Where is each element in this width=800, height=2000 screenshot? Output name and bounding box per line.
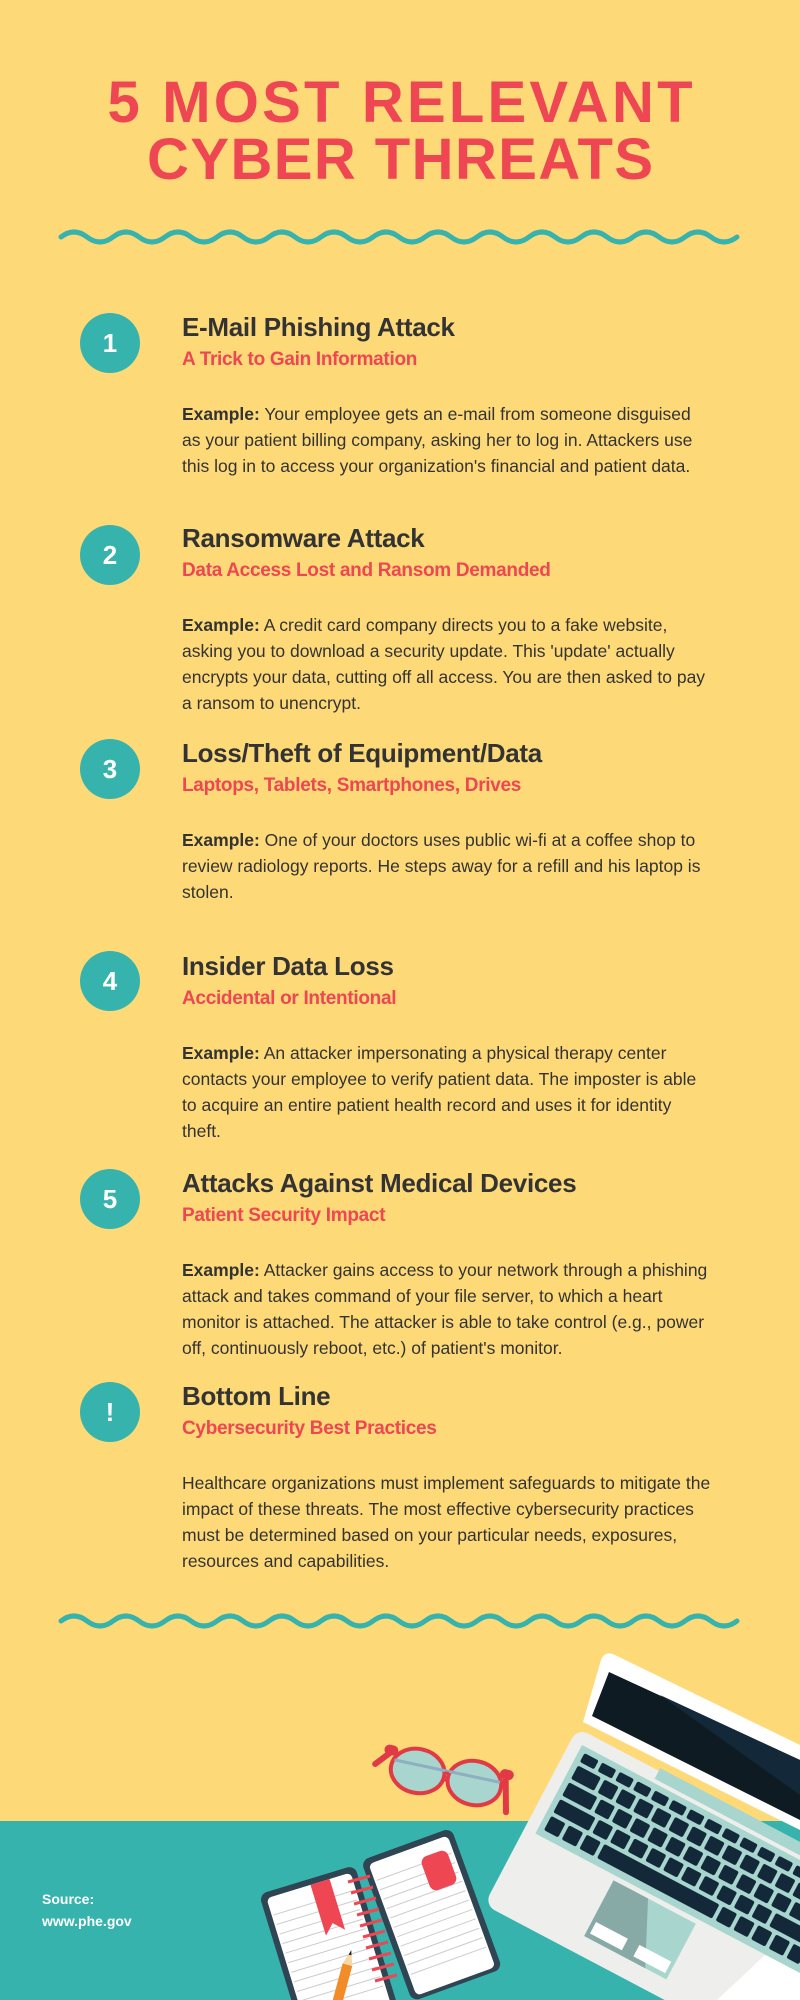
icon: number 2: 2: [103, 540, 117, 570]
panel: medical devices: Example: Attacker gains access to your network through a phishing attack and takes command of your file server, to which a heart monitor is attached. The attacker is able to take control (e.g., power off, continuously reboot, etc.) of patient's monitor.: [182, 1260, 707, 1358]
icon: number 1: [80, 313, 140, 373]
panel: bottom line: Healthcare organizations must implement safeguards to mitigate the impact of these threats. The most effective cybersecurity practices must be determined based on your particular needs, exposures, resources and capabilities.: [182, 1473, 710, 1571]
panel: email phishing: E-Mail Phishing Attack: [182, 312, 455, 342]
panel: medical devices: [182, 1168, 707, 1358]
panel: medical devices: Attacks Against Medical Devices: [182, 1168, 576, 1198]
icon: number 5: [80, 1169, 140, 1229]
source text: [42, 1891, 132, 1929]
title: [108, 70, 692, 192]
panel: insider data loss: Example: An attacker impersonating a physical therapy center contacts your employee to verify patient data. The imposter is able to acquire an entire patient health record and uses it for identity theft.: [182, 1043, 696, 1141]
panel: loss/theft: [182, 738, 700, 902]
icon: pencil: [330, 1949, 356, 2000]
panel: email phishing: [182, 312, 692, 476]
icon: number 2: [80, 525, 140, 585]
panel: ransomware: Ransomware Attack: [182, 523, 424, 553]
panel: bottom line: Cybersecurity Best Practices: [182, 1418, 437, 1439]
icon: exclamation: !: [106, 1397, 114, 1427]
panel: ransomware: Example: A credit card company directs you to a fake website, asking you to download a security update. This 'update' actually encrypts your data, cutting off all access. You are then asked to pay a ransom to unencrypt.: [182, 615, 705, 713]
icon: glasses: [371, 1741, 515, 1812]
panel: bottom line: [182, 1381, 710, 1571]
panel: loss/theft: Example: One of your doctors uses public wi-fi at a coffee shop to review radiology reports. He steps away for a refill and his laptop is stolen.: [182, 830, 700, 902]
panel: email phishing: A Trick to Gain Information: [182, 349, 417, 370]
icon: number 4: 4: [103, 966, 117, 996]
panel: email phishing: Example: Your employee gets an e-mail from someone disguised as your patient billing company, asking her to log in. Attackers use this log in to access your organization's financial and patient data.: [182, 404, 692, 476]
icon: number 4: [80, 951, 140, 1011]
source text: Source:: [42, 1891, 94, 1907]
icon: laptop: [484, 1653, 800, 2000]
panel: insider data loss: Insider Data Loss: [182, 951, 394, 981]
icon: number 5: 5: [103, 1184, 117, 1214]
panel: ransomware: [182, 523, 705, 713]
icon: number 3: 3: [103, 754, 117, 784]
panel: bottom line: Bottom Line: [182, 1381, 330, 1411]
icon: number 1: 1: [103, 328, 117, 358]
source text: www.phe.gov: [42, 1913, 132, 1929]
panel: insider data loss: [182, 951, 696, 1141]
icon: notebook: [259, 1828, 502, 2000]
panel: loss/theft: Loss/Theft of Equipment/Data: [182, 738, 542, 768]
panel: insider data loss: Accidental or Intentional: [182, 988, 396, 1009]
title: 5 MOST RELEVANT: [108, 70, 692, 135]
title: CYBER THREATS: [147, 127, 653, 192]
panel: ransomware: Data Access Lost and Ransom Demanded: [182, 560, 551, 581]
icon: number 3: [80, 739, 140, 799]
panel: loss/theft: Laptops, Tablets, Smartphones, Drives: [182, 775, 521, 796]
icon: exclamation: [80, 1382, 140, 1442]
panel: medical devices: Patient Security Impact: [182, 1205, 385, 1226]
footer illustration: [0, 1653, 800, 2000]
